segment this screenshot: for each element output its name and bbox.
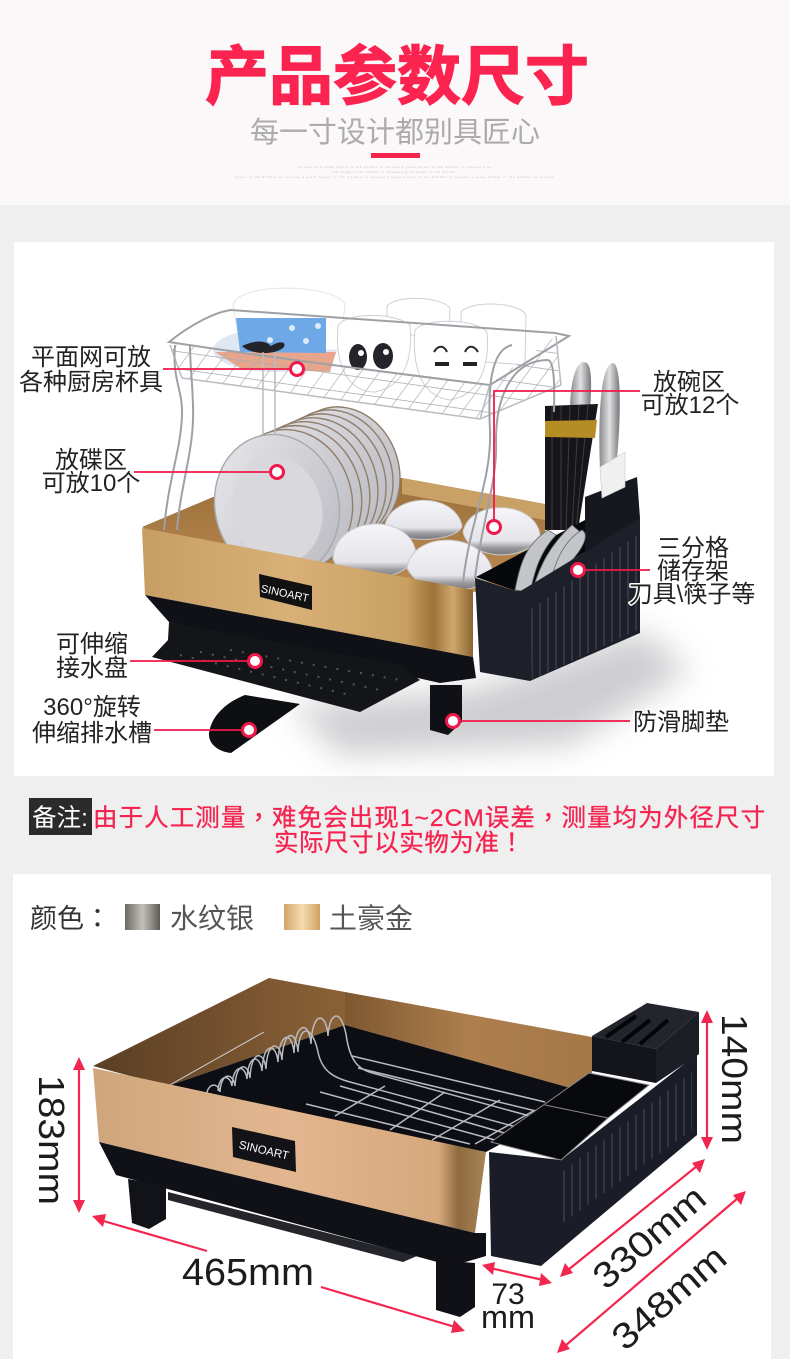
fine print bbox=[234, 165, 554, 179]
callout: bowl area: 可放12个 bbox=[641, 392, 739, 419]
accent bar bbox=[371, 153, 420, 158]
brand badge bbox=[259, 574, 312, 610]
callout: retractable drip tray: 可伸缩 bbox=[56, 631, 128, 658]
gold front panel bbox=[142, 528, 473, 657]
title: 产品参数尺寸 bbox=[205, 41, 589, 113]
chopsticks bbox=[545, 404, 598, 530]
callout: three-compartment caddy: 刀具\筷子等 bbox=[629, 581, 755, 608]
colour legend: 颜色： bbox=[30, 897, 111, 936]
callout: three-compartment caddy: 储存架 bbox=[657, 558, 729, 585]
drip tray bbox=[152, 622, 420, 712]
callout: non-slip feet: 防滑脚垫 bbox=[633, 709, 729, 736]
illustration: two-tier dish rack bbox=[142, 288, 640, 753]
drain spout bbox=[209, 695, 300, 753]
cleaver bbox=[600, 452, 625, 498]
colour legend: 土豪金 bbox=[329, 903, 413, 934]
dimension: 73mm: mm bbox=[481, 1299, 535, 1335]
storage caddy front bbox=[475, 518, 640, 681]
dimension: 73mm bbox=[481, 1262, 552, 1335]
wire dish rack bbox=[168, 1016, 545, 1144]
callout: bowl area bbox=[488, 369, 739, 534]
illustration: drying rack base bbox=[93, 978, 699, 1317]
left inner wall bbox=[93, 978, 345, 1086]
fine print: eat helper in the kitchen to receive a great helper in the kitchen bbox=[333, 170, 455, 174]
cutlery bbox=[515, 525, 585, 592]
callout: flat mesh: 平面网可放 bbox=[31, 344, 151, 371]
dimension: 140mm: 140mm bbox=[714, 1014, 755, 1144]
dimension: 183mm: 183mm bbox=[31, 1075, 72, 1205]
dimension: 330mm bbox=[560, 1159, 714, 1297]
caddy ribs bbox=[558, 1072, 692, 1225]
note bbox=[29, 798, 765, 859]
callout: flat mesh bbox=[19, 344, 304, 396]
rack floor bbox=[168, 1025, 592, 1152]
dimension: 330mm: 330mm bbox=[584, 1177, 714, 1297]
caddy compartments bbox=[491, 1073, 649, 1160]
leg bbox=[430, 685, 462, 735]
tray under base bbox=[168, 1192, 417, 1262]
callout: plate area: 可放10个 bbox=[42, 470, 140, 497]
back wall bbox=[345, 992, 592, 1094]
panel: colours and dimensions bbox=[13, 874, 771, 1359]
callout: flat mesh: 各种厨房杯具 bbox=[19, 369, 163, 396]
callout: retractable drip tray: 接水盘 bbox=[56, 655, 128, 682]
callout: plate area bbox=[42, 447, 284, 497]
storage caddy back and knife block bbox=[476, 477, 640, 600]
callout: retractable drip tray bbox=[56, 631, 262, 682]
knives bbox=[570, 362, 620, 470]
wire shelf bbox=[164, 310, 569, 582]
dimension: 140mm bbox=[701, 1010, 755, 1150]
note tag: 备注: bbox=[32, 804, 88, 832]
gold front bbox=[93, 1068, 486, 1233]
swatch: silver bbox=[125, 904, 160, 930]
callout: rotating drain: 伸缩排水槽 bbox=[32, 720, 152, 747]
brand badge: SINOART bbox=[238, 1139, 290, 1163]
dimension: 348mm: 348mm bbox=[603, 1237, 734, 1358]
note text bbox=[93, 799, 765, 859]
shadow under rack bbox=[290, 630, 690, 755]
callout: bowl area: 放碗区 bbox=[653, 369, 725, 396]
panel: product features bbox=[14, 242, 774, 776]
dimension: 465mm: 465mm bbox=[182, 1252, 314, 1294]
note text: 由于人工测量，难免会出现1~2CM误差，测量均为外径尺寸 bbox=[93, 799, 765, 834]
brand badge: SINOART bbox=[260, 583, 310, 605]
callout: non-slip feet bbox=[446, 709, 729, 736]
black base bbox=[145, 595, 476, 683]
note tag bbox=[29, 798, 92, 835]
header band bbox=[0, 0, 790, 205]
dimension: 348mm bbox=[557, 1191, 746, 1358]
colour legend bbox=[30, 897, 413, 936]
dimension: 183mm bbox=[31, 1057, 85, 1213]
subtitle: 每一寸设计都别具匠心 bbox=[250, 116, 540, 149]
dimension: 465mm bbox=[92, 1214, 465, 1333]
bin interior bbox=[142, 478, 545, 600]
knife block bbox=[592, 1003, 699, 1083]
callout: three-compartment caddy bbox=[572, 535, 755, 608]
plates bbox=[200, 392, 417, 590]
bowls bbox=[333, 500, 540, 590]
fine print: To receive a great helper in the kitchen to receive a great helper in the kitchen to receive a go bbox=[298, 165, 491, 169]
brand badge bbox=[232, 1127, 296, 1172]
base bbox=[99, 1142, 486, 1266]
fine print: helper in the kitchen to receive a great helper in the kitchen to receive a great helper in the kitchen to receive a great helper in the kitchen to receive bbox=[234, 175, 554, 179]
colour legend: 水纹银 bbox=[170, 903, 254, 934]
callout: rotating drain: 360°旋转 bbox=[43, 694, 141, 721]
callout: plate area: 放碟区 bbox=[55, 447, 127, 474]
callout: rotating drain bbox=[32, 694, 256, 747]
callout: three-compartment caddy: 三分格 bbox=[657, 535, 729, 562]
swatch: gold bbox=[284, 904, 320, 930]
right leg bbox=[436, 1260, 475, 1317]
note text: 实际尺寸以实物为准！ bbox=[274, 824, 524, 859]
left leg bbox=[128, 1179, 166, 1229]
dimension: 73mm: 73 bbox=[491, 1278, 525, 1311]
upper tier: dishes and cups bbox=[213, 288, 526, 400]
caddy body bbox=[489, 1054, 697, 1266]
